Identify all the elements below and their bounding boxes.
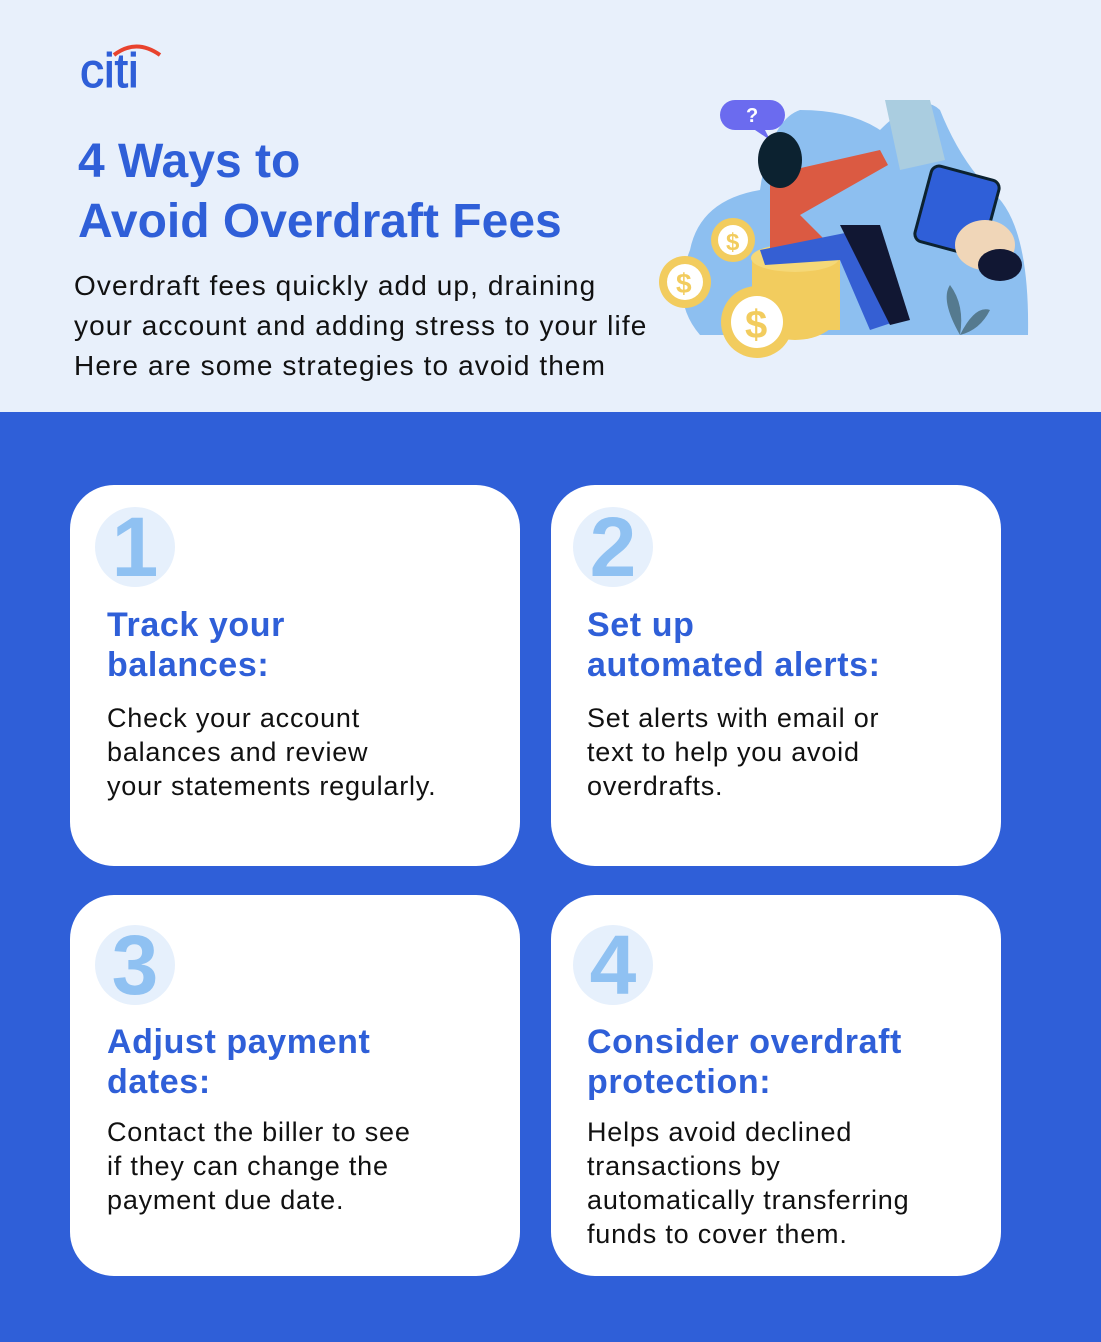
text 4: transactions by <box>587 1151 781 1181</box>
number badge 3 <box>95 925 175 1005</box>
heading 1: Track your <box>107 606 285 644</box>
text 4: funds to cover them. <box>587 1219 848 1249</box>
text 1: Check your account <box>107 703 360 733</box>
illustration: woman on coins with calculator <box>659 100 1028 358</box>
heading 2 <box>587 606 881 684</box>
heading 3: Adjust payment <box>107 1023 370 1061</box>
illustration: woman on coins with calculator: $ <box>676 268 692 299</box>
illustration: woman on coins with calculator: ? <box>746 105 758 127</box>
number badge 2 <box>573 507 653 587</box>
panel: 2 alerts <box>551 485 1001 866</box>
text 3: payment due date. <box>107 1185 344 1215</box>
illustration: woman on coins with calculator: $ <box>726 229 740 256</box>
number badge 4 <box>573 925 653 1005</box>
text 2: overdrafts. <box>587 771 723 801</box>
text 2 <box>587 703 879 801</box>
text 4: Helps avoid declined <box>587 1117 852 1147</box>
heading 2: automated alerts: <box>587 646 881 684</box>
title: 4 Ways to <box>78 135 300 188</box>
text 1: your statements regularly. <box>107 771 436 801</box>
number badge 4: 4 <box>590 918 636 1012</box>
intro text: Overdraft fees quickly add up, draining <box>74 270 596 301</box>
number badge 1 <box>95 507 175 587</box>
illustration: woman on coins with calculator: $ <box>745 303 767 347</box>
panel: 3 payment dates <box>70 895 520 1276</box>
text 1: balances and review <box>107 737 368 767</box>
text 3 <box>107 1117 411 1215</box>
heading 4: protection: <box>587 1063 771 1101</box>
number badge 1: 1 <box>112 500 158 594</box>
text 3: Contact the biller to see <box>107 1117 411 1147</box>
heading 1 <box>107 606 285 684</box>
heading 4: Consider overdraft <box>587 1023 902 1061</box>
intro text <box>74 270 647 381</box>
panel: 4 overdraft protection <box>551 895 1001 1276</box>
intro text: Here are some strategies to avoid them <box>74 350 606 381</box>
heading 3: dates: <box>107 1063 211 1101</box>
intro text: your account and adding stress to your life <box>74 310 647 341</box>
number badge 3: 3 <box>112 918 158 1012</box>
title: Avoid Overdraft Fees <box>78 195 562 248</box>
blue background section <box>0 412 1101 1342</box>
heading 1: balances: <box>107 646 269 684</box>
text 3: if they can change the <box>107 1151 389 1181</box>
heading 4 <box>587 1023 902 1101</box>
panel: 1 track balances <box>70 485 520 866</box>
text 1 <box>107 703 436 801</box>
heading 2: Set up <box>587 606 694 644</box>
text 4 <box>587 1117 909 1249</box>
title <box>78 135 562 248</box>
text 2: text to help you avoid <box>587 737 860 767</box>
text 4: automatically transferring <box>587 1185 909 1215</box>
number badge 2: 2 <box>590 500 636 594</box>
text 2: Set alerts with email or <box>587 703 879 733</box>
heading 3 <box>107 1023 370 1101</box>
